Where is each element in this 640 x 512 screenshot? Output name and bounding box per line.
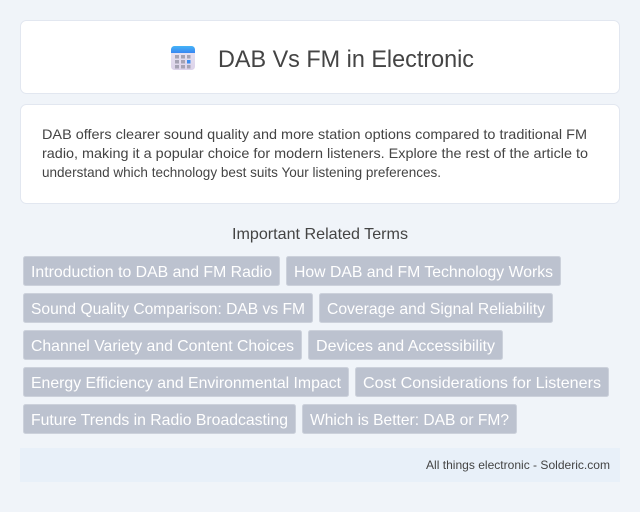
tag list bbox=[24, 256, 608, 434]
footer bbox=[20, 448, 620, 482]
text: intro line 1: DAB offers clearer sound quality and more station options compared to traditional FM bbox=[42, 126, 587, 142]
icon: calendar bbox=[171, 46, 195, 70]
heading: related terms: Important Related Terms bbox=[232, 226, 408, 243]
tag: energy bbox=[24, 368, 348, 396]
footer credit: All things electronic - Solderic.com bbox=[426, 458, 610, 472]
tag: which is better: Which is Better: DAB or FM? bbox=[310, 412, 509, 429]
tag: future trends: Future Trends in Radio Broadcasting bbox=[31, 412, 288, 429]
tag: technology bbox=[286, 256, 560, 286]
panel: title header bbox=[20, 20, 620, 94]
title: DAB Vs FM in Electronic bbox=[218, 46, 474, 73]
tag: channel variety: Channel Variety and Content Choices bbox=[31, 338, 294, 355]
tag: future trends bbox=[24, 404, 296, 434]
tag: which is better bbox=[302, 404, 516, 434]
tag: technology: How DAB and FM Technology Works bbox=[294, 264, 553, 281]
text: intro line 2: radio, making it a popular choice for modern listeners. Explore the rest of the article to bbox=[42, 145, 588, 161]
tag: cost: Cost Considerations for Listeners bbox=[363, 375, 601, 392]
tag: channel variety bbox=[24, 330, 302, 360]
tag: sound quality: Sound Quality Comparison: DAB vs FM bbox=[31, 301, 305, 318]
tag: coverage bbox=[320, 294, 552, 322]
tag: devices bbox=[308, 330, 502, 360]
tag: devices: Devices and Accessibility bbox=[316, 338, 495, 355]
tag: cost bbox=[356, 368, 608, 396]
tag: coverage: Coverage and Signal Reliability bbox=[327, 301, 545, 318]
tag: introduction bbox=[24, 256, 280, 286]
tag: introduction: Introduction to DAB and FM Radio bbox=[31, 264, 272, 281]
tag: sound quality bbox=[24, 294, 312, 322]
tag: energy: Energy Efficiency and Environmental Impact bbox=[31, 375, 342, 392]
panel: intro paragraph bbox=[20, 104, 620, 204]
text: intro line 3: understand which technology best suits Your listening preferences. bbox=[42, 164, 441, 180]
